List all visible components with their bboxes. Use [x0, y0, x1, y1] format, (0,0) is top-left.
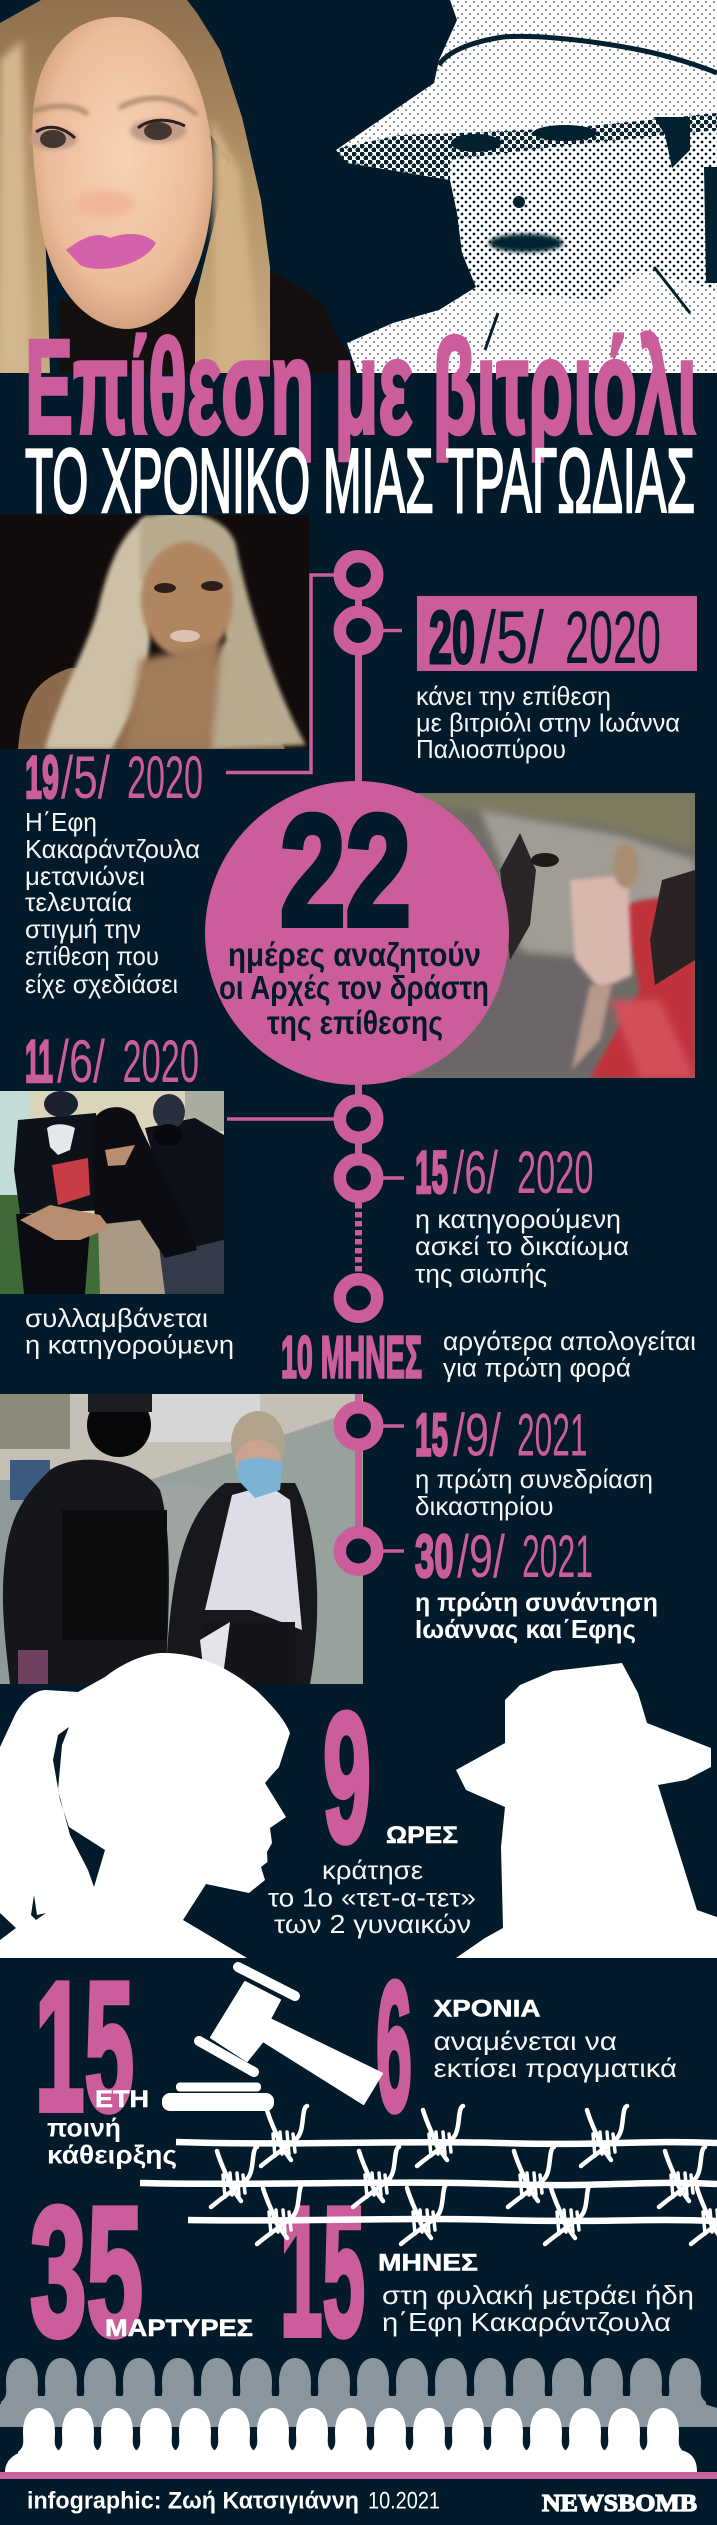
- date 19/5/2020: 2020: [127, 744, 203, 811]
- text: first session: [415, 1464, 653, 1521]
- stat: 15 months: [280, 2168, 694, 2374]
- stat: 35 witnesses: ΜΑΡΤΥΡΕΣ: [105, 2315, 253, 2342]
- crowd: grey row: [0, 2358, 717, 2427]
- crowd: white row: [5, 2408, 697, 2472]
- stat: 15 months: 15: [280, 2168, 365, 2374]
- text: right of silence: ασκεί το δικαίωμα: [415, 1231, 629, 1261]
- stat: 15 years: ποινή: [47, 2113, 121, 2143]
- circle: 22 days: ημέρες αναζητούν: [228, 936, 481, 973]
- text: Efi regrets: Κακαράντζουλα: [25, 834, 200, 864]
- photo: halftone hat figure: [330, 0, 717, 380]
- text: right of silence: η κατηγορούμενη: [415, 1204, 621, 1234]
- text: Efi regrets: επίθεση που: [25, 941, 159, 971]
- credit: infographic: Ζωή Κατσιγιάννη: [27, 2488, 359, 2514]
- silhouette: woman with ponytail: [0, 1653, 290, 1958]
- credit: 10.2021: [368, 2488, 440, 2514]
- circle: 22 days: οι Αρχές τον δράστη: [219, 969, 489, 1006]
- date 30/9/2021: 30: [415, 1523, 454, 1590]
- date 19/5/2020: /5/: [61, 744, 110, 811]
- stat: 6 years: εκτίσει πραγματικά: [434, 2053, 677, 2083]
- text: Efi regrets: μετανιώνει: [25, 861, 145, 891]
- stat: 15 years: κάθειρξης: [47, 2140, 177, 2170]
- stat: 15 months: η΄Εφη Κακαράντζουλα: [382, 2307, 671, 2337]
- text: arrested: η κατηγορούμενη: [25, 1330, 234, 1360]
- text: attack description: [416, 681, 680, 764]
- stat: 6 years: αναμένεται να: [434, 2026, 617, 2056]
- date 11/6/2020: [25, 1028, 199, 1095]
- date 19/5/2020: 19: [25, 744, 59, 811]
- date box 20/5/2020: /5/: [480, 596, 544, 679]
- silhouette: figure with hat: [456, 1663, 717, 1958]
- date 15/9/2021: [415, 1402, 588, 1469]
- date 15/9/2021: 15: [415, 1402, 448, 1469]
- date 15/6/2020: 15: [415, 1139, 448, 1206]
- text: Efi regrets: τελευταία: [25, 887, 132, 917]
- stat: 9 hours: 9: [323, 1674, 371, 1880]
- stat: 15 years: 15: [35, 1943, 134, 2149]
- stat: 6 years: 6: [376, 1943, 412, 2149]
- stat: 6 years: [376, 1943, 677, 2149]
- text: first meeting: η πρώτη συνάντηση: [415, 1587, 658, 1617]
- date 30/9/2021: 2021: [522, 1523, 593, 1590]
- text: first meeting: Ιωάννας και΄Εφης: [415, 1614, 636, 1644]
- photo: woman portrait: [0, 0, 357, 373]
- text: Efi regrets: Η΄Εφη: [25, 807, 97, 837]
- date 11/6/2020: /6/: [57, 1028, 105, 1095]
- stat: 9 hours: ΩΡΕΣ: [386, 1822, 458, 1849]
- logo: NEWSBOMB: NEWSBOMB: [542, 2491, 697, 2517]
- stat: 9 hours: κράτησε: [322, 1855, 423, 1885]
- text: Efi regrets: στιγμή την: [25, 914, 141, 944]
- timeline middle: [340, 1085, 404, 1317]
- text: first meeting: [415, 1587, 658, 1644]
- stat: 15 years: ΕΤΗ: [95, 2086, 149, 2113]
- text: right of silence: [415, 1204, 629, 1288]
- stat: 15 months: στη φυλακή μετράει ήδη: [382, 2280, 694, 2310]
- timeline lower: [340, 1394, 404, 1570]
- stat: 35 witnesses: 35: [30, 2168, 143, 2374]
- barbed wire: [140, 2106, 717, 2244]
- text: Efi regrets: είχε σχεδιάσει: [25, 969, 178, 999]
- date 19/5/2020: [25, 744, 203, 811]
- text: right of silence: της σιωπής: [415, 1258, 547, 1288]
- photo: police escort: [0, 1393, 363, 1684]
- date 11/6/2020: 2020: [122, 1028, 199, 1095]
- date 15/9/2021: 2021: [517, 1402, 588, 1469]
- pink strip: [0, 2472, 717, 2479]
- stat: 6 years: ΧΡΟΝΙΑ: [434, 1996, 540, 2023]
- photo: arrest: [0, 1091, 224, 1294]
- stat: 15 years: [35, 1943, 177, 2170]
- text: arrested: [25, 1303, 234, 1360]
- text: attack description: κάνει την επίθεση: [416, 681, 611, 711]
- text: attack description: με βιτριόλι στην Ιωάννα: [416, 708, 680, 738]
- text: attack description: Παλιοσπύρου: [416, 734, 566, 764]
- stat: 9 hours: το 1ο «τετ-α-τετ»: [268, 1883, 476, 1913]
- timeline top: [226, 556, 402, 800]
- callout: 10 months: αργότερα απολογείται: [443, 1326, 696, 1356]
- date 15/9/2021: /9/: [453, 1402, 501, 1469]
- text: arrested: συλλαμβάνεται: [25, 1303, 208, 1333]
- callout: 10 months: 10 ΜΗΝΕΣ: [281, 1324, 422, 1390]
- icon: gavel: [162, 1967, 382, 2111]
- date 30/9/2021: [415, 1523, 593, 1590]
- circle: 22 days: [205, 781, 509, 1085]
- date 15/6/2020: 2020: [517, 1139, 594, 1206]
- date 15/6/2020: [415, 1139, 594, 1206]
- date 30/9/2021: /9/: [457, 1523, 505, 1590]
- date 11/6/2020: 11: [25, 1028, 53, 1095]
- stat: 9 hours: των 2 γυναικών: [274, 1909, 471, 1939]
- date 15/6/2020: /6/: [453, 1139, 498, 1206]
- text: first session: δικαστηρίου: [415, 1491, 554, 1521]
- stat: 9 hours: [268, 1674, 476, 1939]
- callout: 10 months: για πρώτη φορά: [443, 1353, 631, 1383]
- photo: street scene: [400, 793, 695, 1078]
- date box 20/5/2020: 20: [429, 596, 475, 679]
- connector: arrest to timeline: [227, 1117, 335, 1121]
- date box 20/5/2020: [417, 596, 697, 679]
- circle: 22 days: της επίθεσης: [267, 1004, 443, 1041]
- circle: 22 days: 22: [280, 783, 411, 959]
- text: Efi regrets: [25, 807, 200, 999]
- text: first session: η πρώτη συνεδρίαση: [415, 1464, 653, 1494]
- photo: blonde woman: [0, 512, 309, 749]
- stat: 15 months: ΜΗΝΕΣ: [378, 2250, 478, 2277]
